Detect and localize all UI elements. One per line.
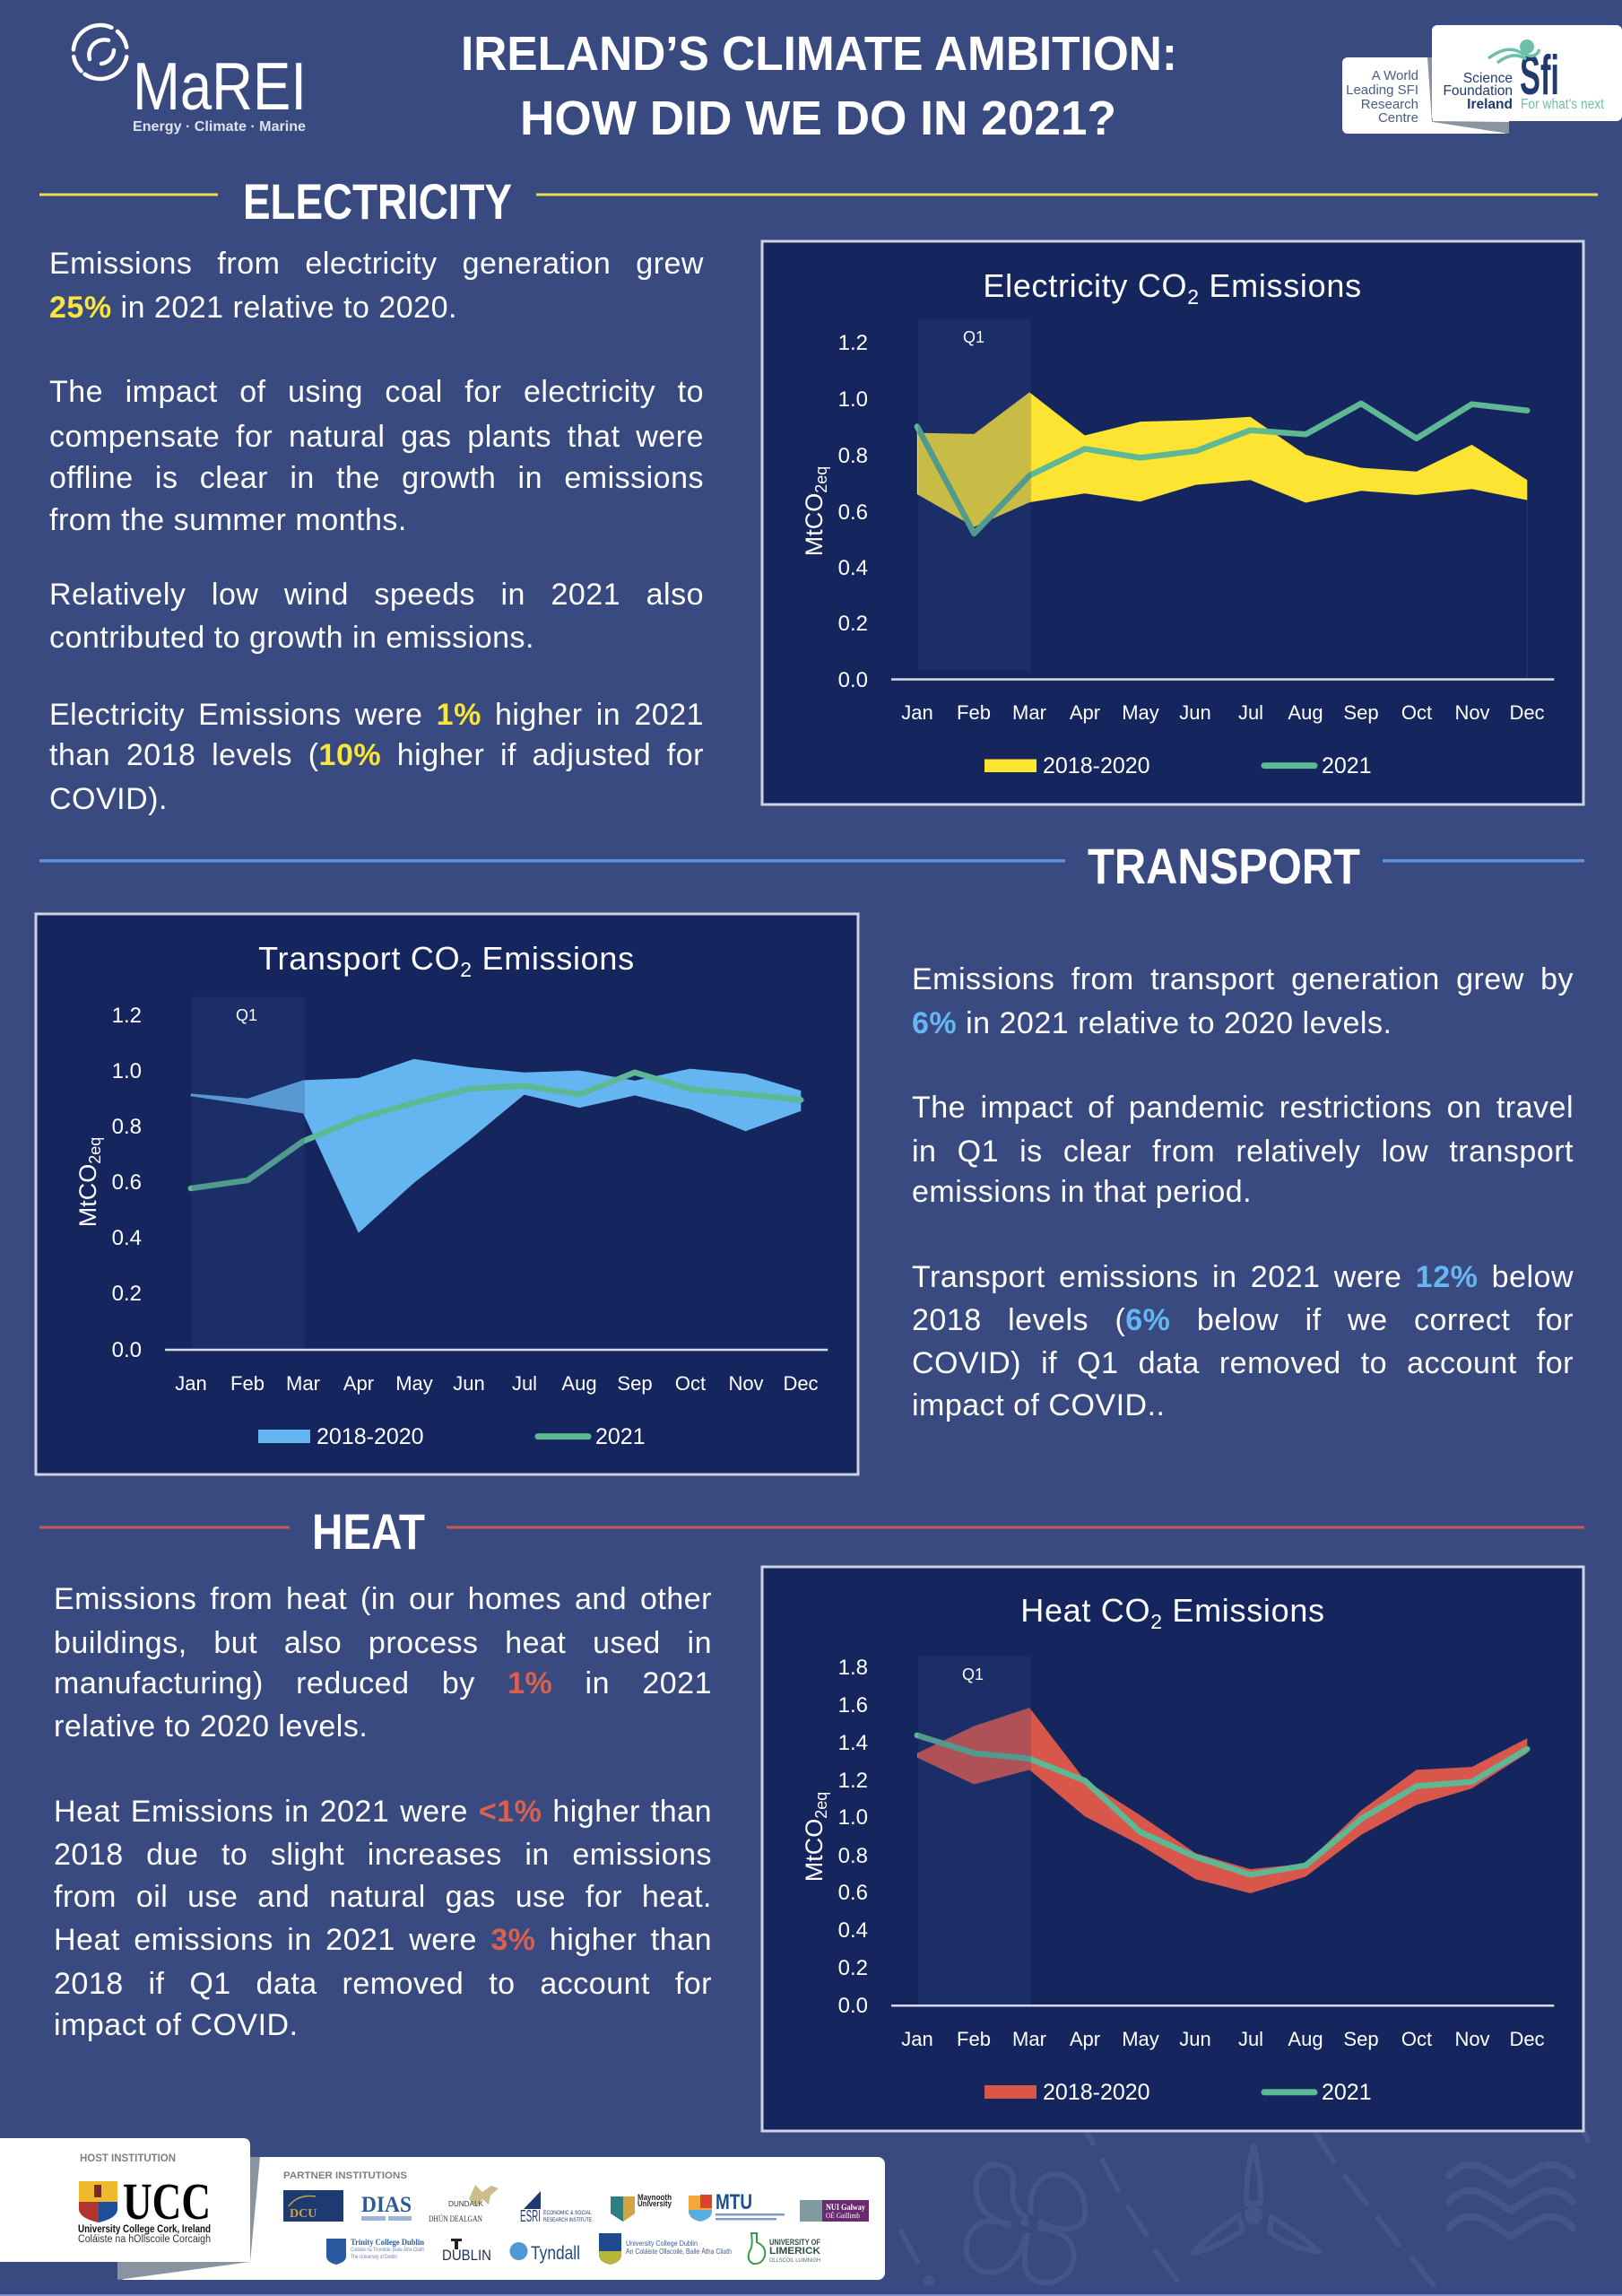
logo: SFI research centre: Sfi (1520, 45, 1559, 107)
heading: electricity: ELECTRICITY (243, 173, 512, 230)
electricity legend: 2021 (1322, 753, 1372, 778)
text block: electricity findings: Relatively low wind speeds in 2021 also (49, 578, 704, 612)
electricity y axis: 0.8 (838, 444, 868, 468)
transport chart title: Emissions (473, 940, 635, 977)
logo: MaREI: Energy · Climate · Marine (133, 119, 306, 135)
text block: heat findings: Heat emissions in 2021 were 3% higher than (54, 1923, 712, 1957)
heat chart title: Emissions (1163, 1592, 1325, 1629)
transport y axis: 1.0 (112, 1059, 142, 1083)
text block: electricity findings: contributed to growth in emissions. (49, 621, 534, 655)
electricity y axis: 0.4 (838, 556, 868, 580)
heat x axis: Feb (957, 2028, 991, 2050)
logo: ESRI: ECONOMIC & SOCIAL (543, 2210, 592, 2216)
panel: heat chart (762, 1567, 1583, 2131)
heat plot (891, 1657, 1554, 2005)
panel: transport chart (36, 914, 858, 1474)
text block: heat findings: Emissions from heat (in our homes and other (54, 1582, 712, 1616)
panel: electricity chart: Q1 (963, 328, 984, 346)
text block: heat findings: manufacturing) reduced by 1% in 2021 (54, 1666, 712, 1700)
logo: DIAS: DIAS (361, 2193, 412, 2217)
heat y axis: 0.6 (838, 1881, 868, 1905)
electricity y axis: MtCO (801, 493, 828, 556)
transport legend (258, 1424, 646, 1449)
title: HOW DID WE DO IN 2021? (520, 91, 1116, 145)
logo: Dundalk: DUNDALK (448, 2200, 484, 2208)
logo: MTU (689, 2190, 785, 2222)
panel: heat chart: Q1 (962, 1665, 984, 1683)
text block: transport findings (912, 962, 1574, 1422)
logo: NUI Galway (800, 2200, 869, 2222)
electricity y axis: 2eq (812, 466, 830, 493)
transport chart title: Transport CO (258, 940, 460, 977)
logo: ESRI: ESRI (520, 2207, 541, 2225)
logo: TU Dublin (442, 2239, 491, 2264)
text block: electricity findings: The impact of using coal for electricity to (49, 375, 704, 409)
text block: transport findings: 2018 levels (6% below if we correct for (912, 1303, 1574, 1337)
heading: heat: HEAT (312, 1503, 425, 1560)
transport plot (165, 997, 828, 1350)
logo: ESRI (520, 2191, 592, 2225)
heat x axis: Aug (1288, 2028, 1323, 2050)
logo: Tyndall (509, 2242, 580, 2264)
text block: electricity findings (49, 247, 704, 816)
transport x axis: Aug (561, 1372, 597, 1395)
heat x axis: Dec (1509, 2028, 1545, 2050)
logo: University of Limerick: OLLSCOIL LUIMNIGH (769, 2257, 820, 2264)
logo: Dundalk: DHÚN DEALGAN (429, 2214, 482, 2223)
logo: NUI Galway: NUI Galway (826, 2203, 865, 2212)
transport x axis: Jul (512, 1372, 537, 1395)
text block: transport findings: Transport emissions in 2021 were 12% below (912, 1260, 1574, 1294)
heat y axis: 0.4 (838, 1918, 868, 1943)
logo: MaREI (74, 25, 307, 135)
footer: host institution card: University College Cork, Ireland (78, 2224, 211, 2235)
logo: University College Dublin: University College Dublin (626, 2239, 698, 2248)
electricity x axis: Jan (901, 701, 933, 724)
text block: electricity findings: 25% in 2021 relative to 2020. (49, 291, 457, 325)
heat chart title: 2 (1150, 1610, 1163, 1633)
heat legend: 2021 (1322, 2080, 1372, 2105)
electricity x axis: Apr (1070, 701, 1100, 724)
logo: SFI research centre: Leading SFI (1346, 83, 1418, 98)
heading: transport (39, 838, 1584, 894)
transport x axis: Sep (617, 1372, 653, 1395)
title: IRELAND’S CLIMATE AMBITION: (461, 27, 1177, 81)
heat y axis: 1.8 (838, 1656, 868, 1680)
transport x axis: Apr (343, 1372, 374, 1395)
heat y axis: 2eq (812, 1792, 830, 1819)
heat legend: 2018-2020 (1043, 2080, 1150, 2105)
logo: UCC crest (79, 2181, 117, 2222)
transport y axis: 0.0 (112, 1338, 142, 1362)
electricity x axis: Jul (1238, 701, 1263, 724)
logo: SFI research centre: Centre (1378, 110, 1418, 126)
logo: Dundalk (429, 2185, 499, 2223)
transport x axis: Mar (286, 1372, 320, 1395)
electricity y axis: 1.0 (838, 387, 868, 412)
transport y axis: MtCO (74, 1164, 101, 1227)
heat y axis: MtCO (801, 1819, 828, 1882)
heat y axis: 1.6 (838, 1693, 868, 1718)
heat x axis (901, 2028, 1545, 2050)
footer: host institution card: UCC (123, 2172, 211, 2231)
text block: heat findings: 2018 if Q1 data removed to account for (54, 1967, 712, 2001)
transport chart title: 2 (460, 958, 473, 981)
electricity x axis: Mar (1012, 701, 1046, 724)
logo: SFI research centre: For what's next (1521, 97, 1605, 112)
text block: heat findings: 2018 due to slight increases in emissions (54, 1838, 712, 1872)
transport x axis: Nov (728, 1372, 764, 1395)
transport x axis: Feb (230, 1372, 265, 1395)
heat y axis: 0.8 (838, 1844, 868, 1868)
heading: transport: TRANSPORT (1088, 838, 1360, 894)
text block: heat findings: impact of COVID. (54, 2008, 299, 2042)
logo: University of Limerick: LIMERICK (769, 2246, 820, 2257)
text block: transport findings: Emissions from transport generation grew by (912, 962, 1574, 996)
title (461, 27, 1177, 145)
heat x axis: Jun (1179, 2028, 1211, 2050)
logo: University of Limerick: UNIVERSITY OF (769, 2238, 820, 2247)
heat x axis: Mar (1012, 2028, 1046, 2050)
text block: electricity findings: offline is clear in the growth in emissions (49, 461, 704, 495)
panel: transport chart: Q1 (236, 1006, 257, 1024)
logo: SFI research centre: Science (1463, 71, 1513, 86)
electricity x axis: Feb (957, 701, 991, 724)
electricity legend (984, 753, 1372, 778)
text block: electricity findings: Electricity Emissions were 1% higher in 2021 (49, 698, 704, 732)
heat y axis: 1.2 (838, 1769, 868, 1793)
text block: electricity findings: from the summer months. (49, 503, 407, 537)
footer: host institution card: Coláiste na hOllscoile Corcaigh (78, 2234, 211, 2245)
footer: host institution card (0, 2138, 250, 2262)
logo: Maynooth University: Maynooth (638, 2193, 672, 2203)
heat y axis: 1.4 (838, 1731, 868, 1755)
heat x axis: Jul (1238, 2028, 1263, 2050)
electricity plot (891, 319, 1554, 679)
electricity x axis: May (1122, 701, 1159, 724)
footer: host institution card: HOST INSTITUTION (80, 2152, 176, 2164)
electricity x axis: Dec (1509, 701, 1545, 724)
logo: Trinity College Dublin: The University of Dublin (351, 2255, 397, 2260)
footer: partner institutions card: PARTNER INSTITUTIONS (283, 2170, 407, 2181)
logo: Maynooth University (611, 2193, 672, 2222)
text block: heat findings: from oil use and natural gas use for heat. (54, 1880, 712, 1914)
electricity x axis: Oct (1401, 701, 1432, 724)
transport x axis: Oct (675, 1372, 706, 1395)
electricity y axis: 1.2 (838, 331, 868, 355)
logo: NUI Galway: OÉ Gaillimh (826, 2211, 860, 2220)
heat y axis: 0.2 (838, 1956, 868, 1980)
transport y axis: 0.8 (112, 1115, 142, 1139)
text block: electricity findings: than 2018 levels (10% higher if adjusted for (49, 738, 704, 772)
electricity x axis (901, 701, 1545, 724)
footer: partner institutions card (117, 2157, 885, 2280)
transport y axis: 0.2 (112, 1282, 142, 1306)
heat y axis: 1.0 (838, 1805, 868, 1830)
transport x axis: Dec (783, 1372, 819, 1395)
heat x axis: Jan (901, 2028, 933, 2050)
heat y axis (801, 1656, 868, 2018)
logo: DCU (283, 2190, 343, 2222)
heat x axis: May (1122, 2028, 1159, 2050)
transport x axis: May (395, 1372, 433, 1395)
transport legend: 2021 (595, 1424, 646, 1449)
logo: SFI research centre: A World (1372, 68, 1418, 83)
logo: Tyndall: Tyndall (531, 2243, 580, 2264)
heat x axis: Oct (1401, 2028, 1432, 2050)
text block: transport findings: COVID) if Q1 data removed to account for (912, 1346, 1574, 1380)
electricity y axis: 0.2 (838, 612, 868, 636)
electricity chart title: Electricity CO (983, 267, 1187, 304)
logo: SFI research centre (1342, 25, 1622, 134)
heat y axis: 0.0 (838, 1994, 868, 2018)
text block: transport findings: in Q1 is clear from relatively low transport (912, 1135, 1574, 1169)
logo: DCU: DCU (290, 2207, 317, 2221)
logo: SFI research centre: Research (1361, 97, 1418, 112)
text block: electricity findings: COVID). (49, 782, 168, 816)
heat x axis: Nov (1454, 2028, 1490, 2050)
transport x axis: Jun (453, 1372, 485, 1395)
electricity chart title: Emissions (1200, 267, 1362, 304)
logo: MaREI: MaREI (133, 48, 307, 124)
heat x axis: Apr (1070, 2028, 1100, 2050)
text block: heat findings: Heat Emissions in 2021 were <1% higher than (54, 1795, 712, 1829)
logo: TU Dublin: DUBLIN (442, 2247, 491, 2264)
background watermark icons (901, 2126, 1588, 2286)
transport y axis (74, 1004, 142, 1362)
logo: ESRI: RESEARCH INSTITUTE (543, 2217, 592, 2223)
text block: electricity findings: compensate for natural gas plants that were (49, 420, 704, 454)
transport x axis (175, 1372, 819, 1395)
logo: University College Dublin (599, 2233, 732, 2265)
electricity x axis: Aug (1288, 701, 1323, 724)
text block: heat findings (54, 1582, 712, 2042)
text block: transport findings: 6% in 2021 relative to 2020 levels. (912, 1006, 1392, 1040)
electricity chart title: 2 (1187, 285, 1200, 309)
text block: heat findings: relative to 2020 levels. (54, 1709, 368, 1744)
text block: heat findings: buildings, but also process heat used in (54, 1626, 712, 1660)
logo: SFI research centre: Foundation (1443, 83, 1513, 99)
transport y axis: 0.4 (112, 1226, 142, 1250)
logo: Trinity College Dublin: Trinity College Dublin (351, 2239, 425, 2248)
text block: transport findings: impact of COVID.. (912, 1388, 1165, 1422)
logo: Trinity College Dublin: Coláiste na Tríonóide, Baile Átha Cliath (351, 2247, 424, 2253)
transport y axis: 2eq (86, 1137, 104, 1164)
logo: Trinity College Dublin (326, 2239, 425, 2265)
electricity x axis: Nov (1454, 701, 1490, 724)
logo: MTU: MTU (716, 2190, 752, 2214)
heading: heat (39, 1503, 1584, 1560)
heat legend (984, 2080, 1372, 2105)
transport y axis: 0.6 (112, 1170, 142, 1195)
electricity y axis (801, 331, 868, 692)
logo: Maynooth University: University (638, 2199, 672, 2209)
electricity x axis: Sep (1343, 701, 1379, 724)
electricity y axis: 0.0 (838, 668, 868, 692)
text block: transport findings: emissions in that period. (912, 1175, 1252, 1209)
logo: SFI research centre: Ireland (1467, 97, 1513, 112)
logo: University College Dublin: An Coláiste Ollscoile, Baile Átha Cliath (626, 2247, 732, 2256)
logo: University of Limerick (749, 2233, 820, 2264)
transport legend: 2018-2020 (317, 1424, 424, 1449)
heat chart title: Heat CO (1020, 1592, 1150, 1629)
electricity legend: 2018-2020 (1043, 753, 1150, 778)
text block: electricity findings: Emissions from electricity generation grew (49, 247, 704, 281)
transport y axis: 1.2 (112, 1004, 142, 1028)
heat x axis: Sep (1343, 2028, 1379, 2050)
electricity y axis: 0.6 (838, 500, 868, 525)
heading: electricity (39, 173, 1598, 230)
panel: electricity chart (762, 241, 1583, 804)
transport x axis: Jan (175, 1372, 207, 1395)
electricity x axis: Jun (1179, 701, 1211, 724)
text block: transport findings: The impact of pandemic restrictions on travel (912, 1091, 1574, 1125)
